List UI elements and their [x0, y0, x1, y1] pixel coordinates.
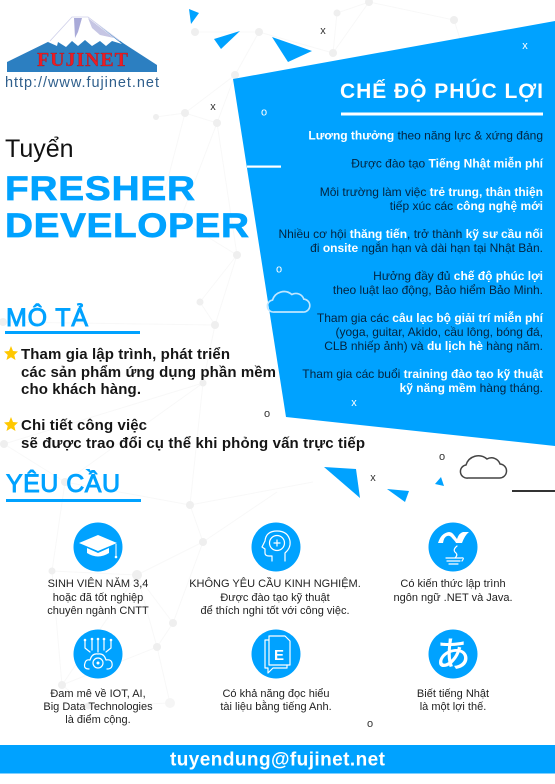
- panel: benefits: [233, 21, 555, 446]
- requirement: student: chuyên ngành CNTT: [47, 605, 149, 617]
- requirement: student: [47, 522, 149, 617]
- requirement: English reading: [220, 630, 332, 713]
- footer: contact email: tuyendung@fujinet.net: [170, 750, 386, 770]
- requirement: .NET and Java: ngôn ngữ .NET và Java.: [393, 592, 513, 604]
- benefits list: Nhiều cơ hội thăng tiến, trở thành kỹ sư cầu nối: [278, 227, 543, 241]
- benefits list: CLB nhiếp ảnh) và du lịch hè hàng năm.: [324, 339, 543, 353]
- benefits list: Hưởng đầy đủ chế độ phúc lợi: [373, 269, 543, 283]
- requirement: no experience: KHÔNG YÊU CẦU KINH NGHIỆM.: [189, 577, 361, 590]
- requirement: IoT, AI, Big Data: Big Data Technologies: [43, 701, 153, 713]
- description list: các sản phẩm ứng dụng phần mềm: [21, 364, 276, 381]
- icon: white cloud: [267, 292, 310, 312]
- description list: [4, 346, 365, 452]
- benefits list: theo luật lao động, Bảo hiểm Bảo Minh.: [333, 283, 543, 297]
- icon: star: [4, 346, 18, 360]
- description list: sẽ được trao đổi cụ thể khi phỏng vấn trực tiếp: [21, 435, 365, 452]
- title: Tuyển Fresher Developer: DEVELOPER: [5, 206, 249, 244]
- scattered x and o marks: x: [320, 25, 326, 37]
- scattered x and o marks: x: [370, 472, 376, 484]
- logo: Fujinet mountain: FUJINET: [37, 49, 129, 71]
- requirement: student: hoặc đã tốt nghiệp: [53, 592, 143, 604]
- benefits list: Lương thưởng theo năng lực & xứng đáng: [308, 128, 543, 142]
- description list: Tham gia lập trình, phát triển: [21, 346, 230, 363]
- description list: cho khách hàng.: [21, 381, 141, 398]
- title: Tuyển Fresher Developer: [5, 135, 249, 244]
- requirement: English reading: tài liệu bằng tiếng Anh.: [220, 700, 332, 713]
- description list: Chi tiết công việc: [21, 417, 147, 434]
- scattered x and o marks: x: [210, 101, 216, 113]
- requirement: no experience: Được đào tạo kỹ thuật: [220, 592, 330, 604]
- benefits list: kỹ năng mềm hàng tháng.: [400, 381, 543, 395]
- scattered x and o marks: [210, 25, 528, 730]
- requirement: no experience: để thích nghi tốt với công việc.: [200, 605, 350, 617]
- footer: contact email: [0, 745, 555, 774]
- heading: benefits: CHẾ ĐỘ PHÚC LỢI: [340, 79, 543, 103]
- heading: description: MÔ TẢ: [6, 302, 88, 332]
- icon: dark cloud: [460, 456, 507, 478]
- heading: requirements: YÊU CẦU: [6, 469, 120, 498]
- requirement: Japanese: [417, 627, 489, 713]
- requirement: English reading: Có khả năng đọc hiểu: [222, 688, 330, 700]
- requirement: IoT, AI, Big Data: [43, 630, 153, 726]
- icon: head with plus: [252, 522, 300, 572]
- requirement: Japanese: là một lợi thế.: [420, 701, 486, 713]
- requirement: Japanese: Biết tiếng Nhật: [417, 688, 489, 700]
- benefits list: (yoga, guitar, Akido, cầu lông, bóng đá,: [336, 325, 543, 339]
- requirement: .NET and Java: Có kiến thức lập trình: [400, 578, 506, 590]
- title: Tuyển Fresher Developer: FRESHER: [5, 169, 195, 207]
- scattered x and o marks: o: [261, 106, 267, 118]
- logo: Fujinet mountain: [5, 17, 159, 91]
- logo: Fujinet mountain: http://www.fujinet.net: [5, 75, 159, 91]
- scattered x and o marks: o: [276, 264, 282, 276]
- benefits list: tiếp xúc các công nghệ mới: [390, 199, 543, 213]
- requirement: IoT, AI, Big Data: là điểm cộng.: [65, 714, 131, 726]
- benefits list: Môi trường làm việc trẻ trung, thân thiện: [320, 185, 543, 199]
- icon: star: [4, 417, 18, 431]
- icon: .NET and Java logos: [428, 522, 478, 572]
- requirement: IoT, AI, Big Data: Đam mê về IOT, AI,: [50, 688, 146, 700]
- requirement: no experience: [189, 522, 361, 617]
- decorative triangles bottom: [324, 467, 444, 502]
- requirement: .NET and Java: [393, 522, 513, 604]
- scattered x and o marks: o: [367, 718, 373, 730]
- icon: circuit brain: [74, 630, 122, 678]
- benefits list: Tham gia các buổi training đào tạo kỹ thuật: [302, 367, 543, 381]
- benefits list: Tham gia các câu lạc bộ giải trí miễn phí: [317, 310, 544, 325]
- icon: graduation cap: [74, 522, 122, 572]
- heading: description: [5, 302, 140, 334]
- scattered x and o marks: x: [351, 397, 357, 409]
- benefits list: Được đào tạo Tiếng Nhật miễn phí: [351, 156, 544, 170]
- title: Tuyển Fresher Developer: Tuyển: [5, 135, 74, 163]
- scattered x and o marks: x: [522, 40, 528, 52]
- scattered x and o marks: o: [439, 451, 445, 463]
- decorative triangles top: [189, 9, 312, 62]
- benefits list: [278, 128, 544, 395]
- benefits list: đi onsite ngắn hạn và dài hạn tại Nhật Bản.: [310, 240, 543, 255]
- icon: hiragana a: あ: [435, 627, 471, 678]
- icon: document with E: E: [274, 647, 284, 664]
- requirement: student: SINH VIÊN NĂM 3,4: [48, 577, 148, 590]
- scattered x and o marks: o: [264, 408, 270, 420]
